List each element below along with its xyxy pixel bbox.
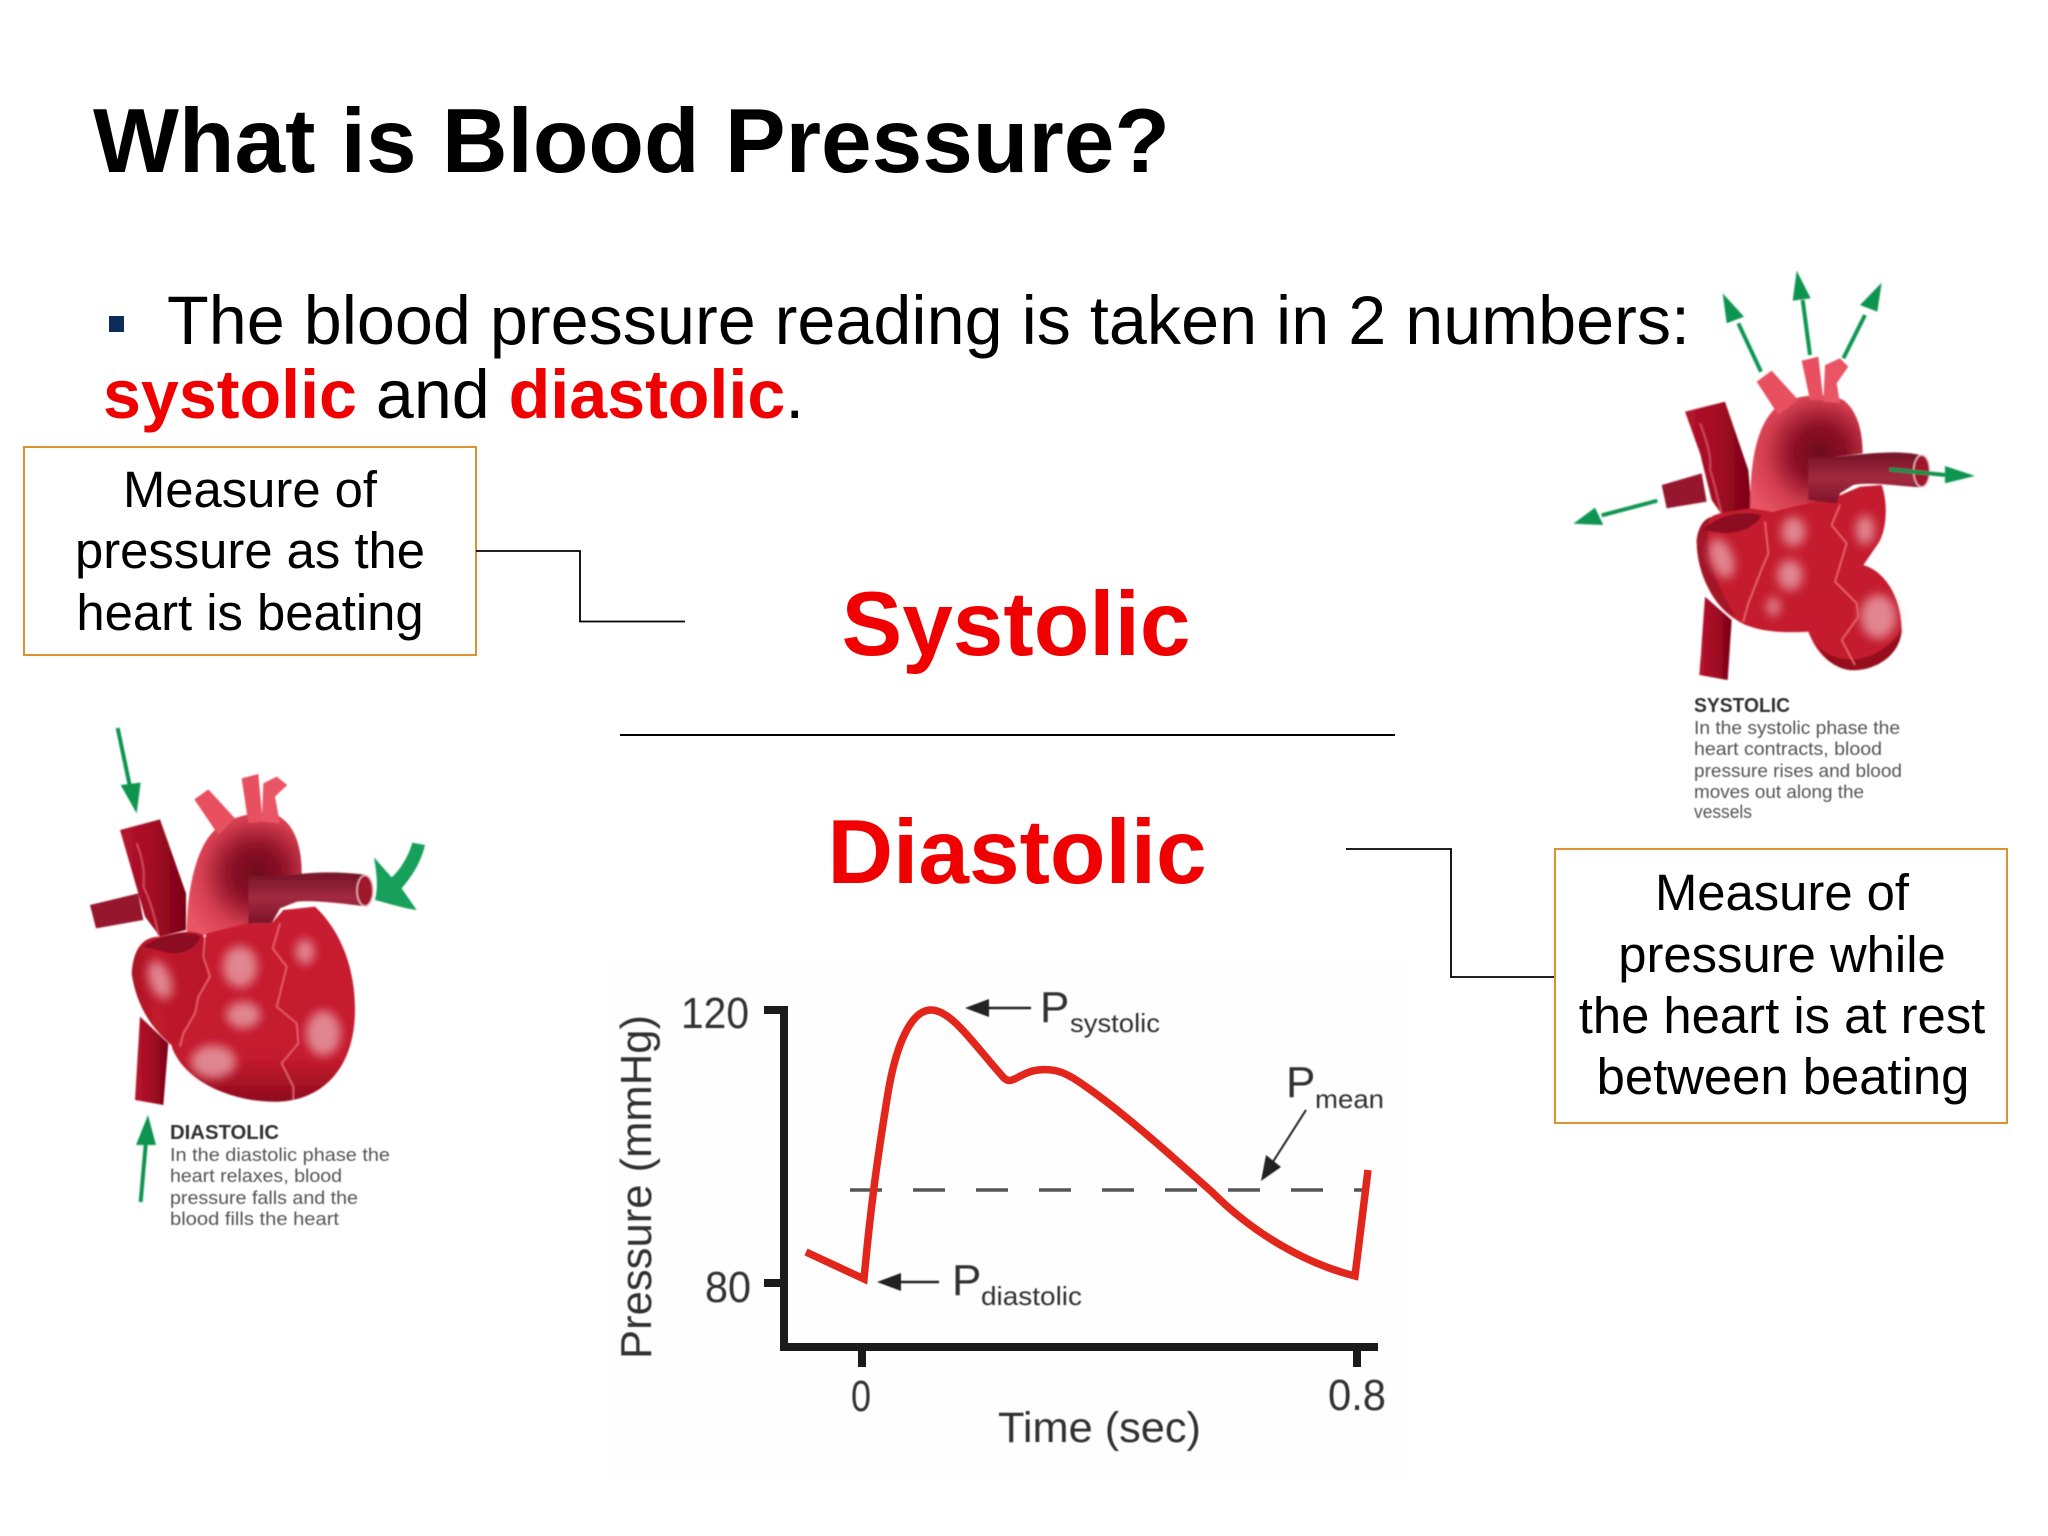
axis tick labels [681,989,1386,1421]
callout: systolic definition [24,447,476,655]
x axis [780,1347,1378,1367]
caption: systolic: moves out along the [1694,781,1864,802]
label: P diastolic: P [952,1256,981,1305]
label: P mean [1261,1058,1384,1181]
caption: systolic: heart contracts, blood [1694,738,1882,759]
caption: diastolic: pressure falls and the [170,1187,358,1208]
caption: systolic: vessels [1694,801,1752,822]
heart body [172,907,355,1102]
reading line one: The blood pressure reading is taken in 2 numbers: [167,283,1690,359]
fraction denominator: Diastolic: Diastolic [827,802,1207,903]
connector: diastolic callout [1346,849,1555,977]
vessels [135,1017,168,1105]
bullet marker [109,316,124,332]
fraction numerator: Systolic: Systolic [842,574,1190,675]
callout: diastolic definition: between beating [1597,1048,1969,1105]
heart body [1697,485,1902,670]
connector: systolic callout [476,551,685,622]
aortic arch [187,813,302,935]
caption: systolic: pressure rises and blood [1694,760,1902,781]
axis tick labels: 0.8 [1328,1371,1386,1420]
caption: diastolic [170,1122,390,1229]
caption: diastolic: In the diastolic phase the [170,1144,390,1165]
vessels [1699,597,1732,680]
bullet text [103,283,1690,433]
callout: diastolic definition [1555,849,2007,1123]
reading line two: systolic and diastolic. [103,357,804,433]
pressure curve [806,1010,1368,1279]
callout: systolic definition: pressure as the [75,522,425,579]
label: P systolic: systolic [1070,1008,1160,1038]
label: P systolic: P [1040,983,1069,1032]
callout: systolic definition: Measure of [123,461,378,518]
label: P diastolic: diastolic [981,1281,1082,1311]
callout: diastolic definition: pressure while [1618,926,1946,983]
axis tick labels: 80 [705,1263,751,1312]
pulmonary artery [1808,452,1929,503]
title: What is Blood Pressure? [93,91,1170,192]
mean pressure dashed line [850,1188,1364,1192]
caption: systolic: In the systolic phase the [1694,717,1900,738]
y axis [764,1010,784,1347]
callout: diastolic definition: Measure of [1655,864,1910,921]
x axis title: Time (sec) [998,1404,1201,1452]
callout: diastolic definition: the heart is at rest [1579,987,1985,1044]
caption: diastolic: DIASTOLIC [170,1122,279,1144]
y axis title: Pressure (mmHg) [612,1015,661,1359]
chart: arterial pressure over time [610,965,1410,1475]
callout: systolic definition: heart is beating [76,584,424,641]
caption: diastolic: blood fills the heart [170,1208,339,1229]
axis tick labels: 120 [681,989,749,1038]
illustration: systolic heart [1573,271,1975,680]
label: P diastolic [877,1256,1082,1311]
caption: systolic: SYSTOLIC [1694,695,1790,717]
axis tick labels: 0 [851,1372,871,1421]
caption: diastolic: heart relaxes, blood [170,1165,342,1186]
pulmonary artery [248,872,373,923]
icon: inflow arrows [118,728,425,1202]
label: P mean: mean [1315,1084,1384,1114]
aortic arch [1750,395,1863,512]
caption: systolic [1694,695,1902,822]
fraction line [620,734,1395,736]
icon: right outflow arrow [1889,466,1975,483]
label: P mean: P [1286,1058,1315,1107]
label: P systolic [965,983,1160,1038]
illustration: diastolic heart [90,728,425,1202]
icon: outflow arrows [1573,271,1882,525]
